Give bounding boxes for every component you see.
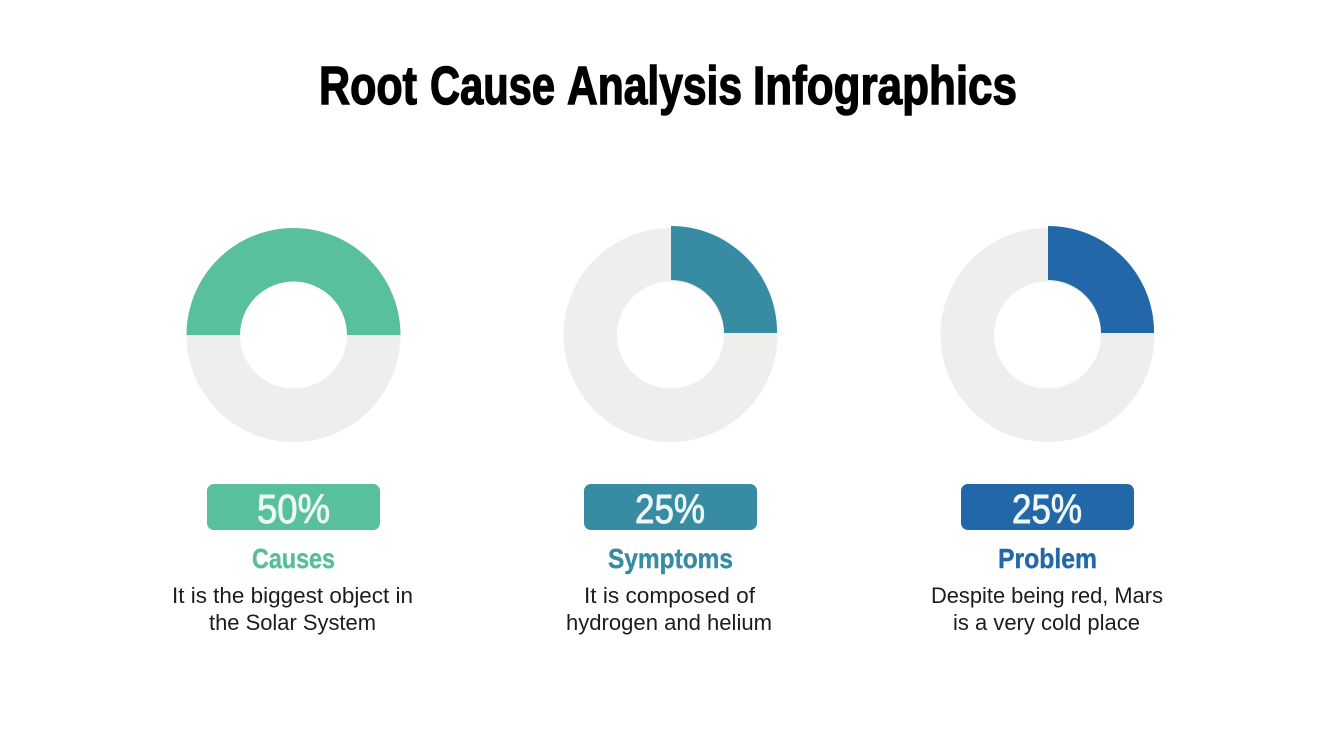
text block: symptoms description: It is composed of (584, 583, 756, 608)
donut chart: causes 50% (186, 228, 400, 415)
panel: causes (172, 228, 413, 635)
percentage badge: 25%: 25% (635, 486, 705, 532)
donut chart: problem 25% (967, 226, 1154, 415)
title: Analysis (567, 56, 742, 116)
percentage badge: 25% (584, 484, 757, 532)
percentage badge: 50% (207, 484, 380, 532)
title (319, 56, 1017, 116)
text block: symptoms description (566, 583, 772, 635)
heading: causes: Causes (252, 543, 335, 574)
panel: symptoms (566, 226, 777, 635)
heading: problem: Problem (998, 543, 1097, 574)
text block: causes description: the Solar System (209, 610, 376, 635)
text block: causes description (172, 583, 413, 635)
title: Cause (430, 56, 555, 116)
heading: symptoms: Symptoms (608, 543, 733, 574)
percentage badge: 25% (961, 484, 1134, 532)
text block: problem description: Despite being red, Mars (931, 583, 1163, 608)
percentage badge: 50%: 50% (257, 486, 330, 532)
text block: problem description (931, 583, 1163, 635)
text block: symptoms description: hydrogen and helium (566, 610, 772, 635)
text block: causes description: It is the biggest object in (172, 583, 413, 608)
panel: problem (931, 226, 1163, 635)
title: Infographics (753, 56, 1017, 116)
donut chart: symptoms 25% (590, 226, 777, 415)
title: Root (319, 56, 417, 116)
percentage badge: 25%: 25% (1012, 486, 1082, 532)
text block: problem description: is a very cold place (953, 610, 1140, 635)
